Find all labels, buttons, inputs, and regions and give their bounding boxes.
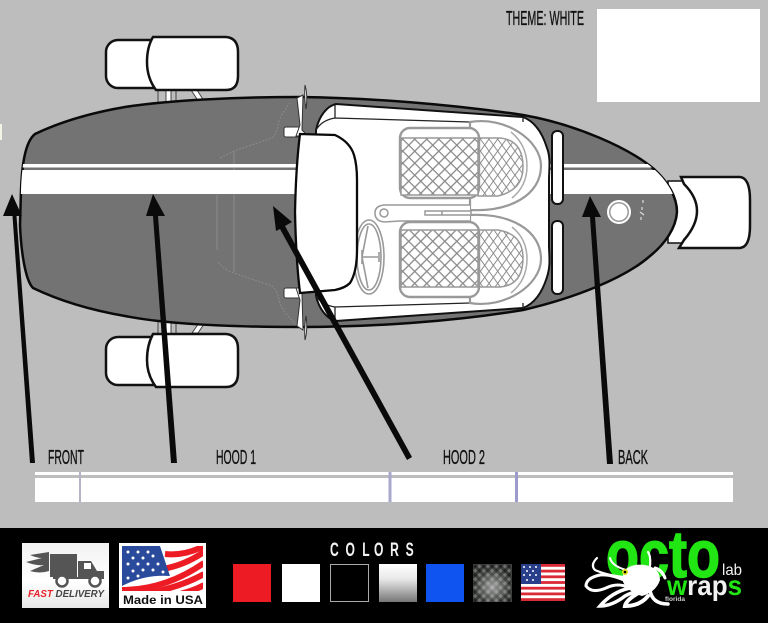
hood lines bbox=[217, 103, 296, 324]
arrow: hood 2 bbox=[273, 206, 412, 460]
swatch: red bbox=[233, 564, 271, 602]
center console bbox=[375, 205, 471, 222]
lower seat back bbox=[470, 215, 541, 304]
upper seat cushion bbox=[400, 128, 479, 198]
colors heading: COLORS bbox=[330, 539, 414, 561]
top rear wheel bbox=[106, 40, 166, 88]
upper seat quilting bbox=[401, 138, 478, 195]
label: hood 1: HOOD 1 bbox=[216, 447, 256, 469]
bottom front wheel bbox=[147, 334, 238, 387]
upper seat back bbox=[470, 121, 541, 210]
wavy flag bbox=[122, 546, 203, 591]
wraps wordmark: wraps bbox=[666, 570, 742, 601]
rear badge bbox=[640, 200, 644, 220]
lower seat cushion bbox=[400, 222, 479, 297]
theme color panel bbox=[597, 9, 760, 102]
bottom suspension bbox=[158, 320, 204, 336]
top suspension bbox=[158, 90, 204, 104]
fast delivery text: FAST DELIVERY bbox=[28, 588, 105, 600]
top front wheel bbox=[147, 37, 238, 90]
swatch: carbon bbox=[473, 564, 512, 602]
arrow: hood 1 bbox=[146, 194, 177, 463]
badge: made in usa bbox=[119, 543, 206, 608]
color selection bar bbox=[35, 472, 733, 502]
made in usa text: Made in USA bbox=[123, 593, 203, 607]
upper seat back trim bbox=[511, 132, 527, 198]
car top view bbox=[18, 37, 750, 387]
lower seat back quilting bbox=[478, 230, 523, 287]
left mirror hinge bottom bbox=[284, 288, 308, 340]
rear tyre bbox=[668, 177, 750, 248]
label: front: FRONT bbox=[48, 447, 84, 469]
octopus eye bbox=[622, 569, 628, 575]
cockpit bbox=[316, 104, 550, 321]
arrow: back bbox=[582, 196, 613, 464]
lower seat quilting bbox=[401, 230, 478, 287]
left mirror hinge top bbox=[284, 85, 308, 137]
octopus icon bbox=[586, 552, 668, 606]
arrow: front bbox=[3, 194, 35, 463]
swatch: american flag bbox=[521, 564, 565, 601]
swatch: black bbox=[330, 564, 368, 602]
label: hood 2: HOOD 2 bbox=[443, 447, 485, 469]
windshield bbox=[295, 134, 357, 293]
edge mark bbox=[0, 124, 2, 140]
lab text: lab bbox=[722, 562, 742, 579]
badge: fast delivery bbox=[22, 543, 109, 608]
lower seat back trim bbox=[511, 227, 527, 293]
fuel cap bbox=[607, 200, 631, 224]
florida text: florida bbox=[665, 597, 686, 603]
rear deck slot lower bbox=[552, 221, 563, 294]
truck icon bbox=[26, 552, 104, 586]
upper seat back quilting bbox=[478, 138, 523, 196]
cockpit inner trim bbox=[316, 105, 523, 320]
swatch: chrome bbox=[379, 564, 417, 602]
swatch: white bbox=[282, 564, 320, 602]
bottom rear wheel bbox=[106, 337, 166, 385]
swatch: blue bbox=[426, 564, 464, 602]
rear deck slot upper bbox=[552, 131, 563, 204]
octo wordmark: octo bbox=[606, 517, 720, 591]
racing stripes bbox=[18, 164, 678, 194]
body bbox=[20, 97, 677, 327]
label: back: BACK bbox=[618, 447, 648, 469]
steering wheel bbox=[354, 220, 384, 294]
theme label: THEME: WHITE bbox=[506, 8, 584, 30]
footer band bbox=[0, 528, 768, 623]
logo: octo wraps lab bbox=[586, 517, 742, 606]
